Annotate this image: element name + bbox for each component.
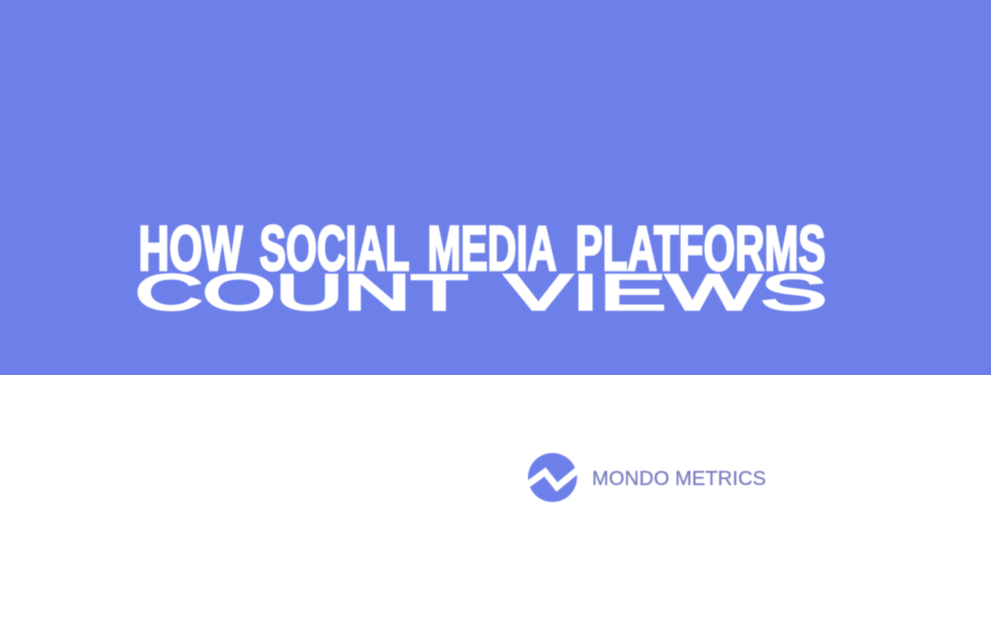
icon: circle with trend line <box>527 453 580 502</box>
panel: blue header band <box>0 0 991 375</box>
title line: how social media platforms <box>138 214 826 284</box>
title line: count views: COUNT <box>135 264 468 320</box>
title line: count views <box>135 264 827 320</box>
title line: how social media platforms: HOW <box>138 214 243 284</box>
title line: how social media platforms: PLATFORMS <box>576 214 826 284</box>
title line: how social media platforms: SOCIAL <box>260 214 410 284</box>
title line: how social media platforms: MEDIA <box>428 214 556 284</box>
title <box>135 214 827 320</box>
logo: mondo metrics <box>527 453 766 502</box>
logo wordmark: MONDO METRICS <box>592 468 766 490</box>
title line: count views: VIEWS <box>505 264 827 320</box>
